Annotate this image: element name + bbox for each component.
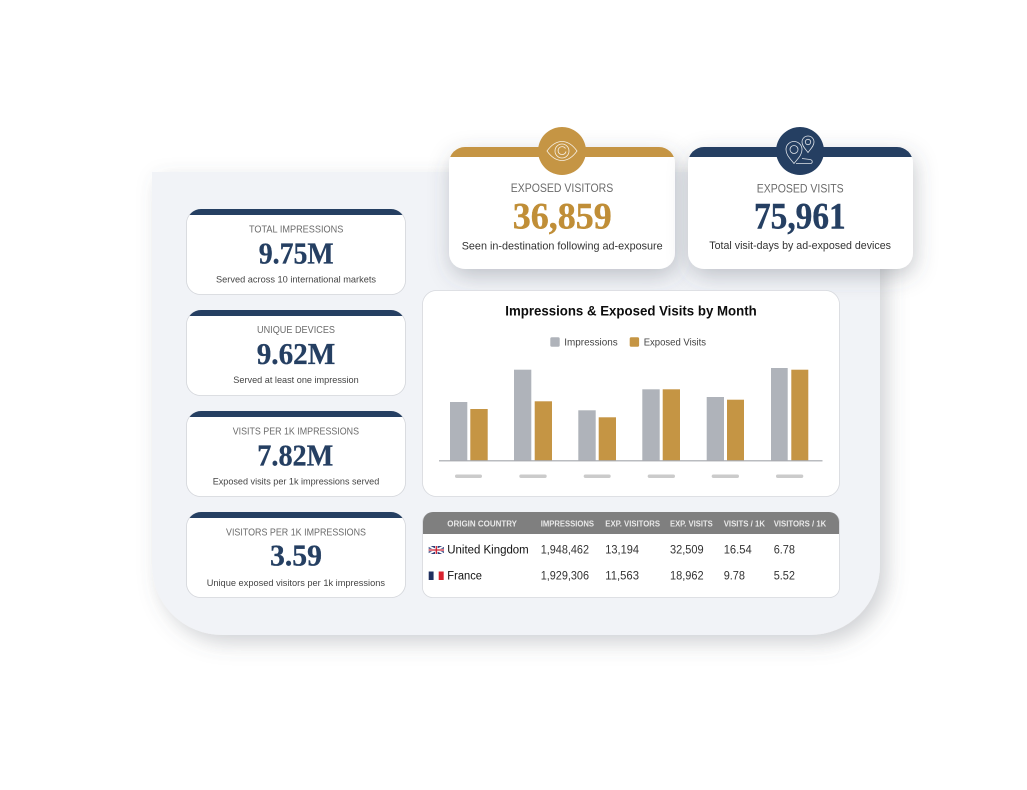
card: total impressions: TOTAL IMPRESSIONS: [249, 224, 343, 236]
card: total impressions: [186, 209, 406, 294]
table header: VISITORS / 1K: [774, 520, 827, 529]
table row: France: 11,563: [605, 571, 639, 583]
card: unique devices: Served at least one impression: [233, 375, 359, 386]
card: visitors per 1k impressions: 3.59: [270, 538, 322, 573]
panel: bar chart card: [422, 290, 840, 496]
table row: United Kingdom: 32,509: [670, 545, 704, 557]
table row: France: 9.78: [724, 571, 745, 583]
icon: eye: [538, 127, 586, 175]
card: visits per 1k impressions: 7.82M: [257, 437, 333, 472]
redacted month labels: [455, 474, 803, 478]
card: visits per 1k impressions: [186, 411, 406, 496]
table row: United Kingdom: 13,194: [605, 545, 640, 557]
chart legend: Exposed Visits: [644, 338, 706, 349]
table header: [423, 512, 839, 534]
card: total impressions: Served across 10 international markets: [216, 274, 376, 285]
card: exposed visits: Total visit-days by ad-exposed devices: [709, 240, 891, 252]
card: total impressions: 9.75M: [259, 236, 334, 271]
card: visits per 1k impressions: VISITS PER 1K IMPRESSIONS: [233, 425, 359, 437]
card: visitors per 1k impressions: VISITORS PER 1K IMPRESSIONS: [226, 526, 366, 538]
card: exposed visitors: [449, 127, 675, 269]
card: visitors per 1k impressions: [186, 512, 406, 598]
table row: France: France: [447, 571, 482, 583]
card: unique devices: 9.62M: [257, 336, 335, 371]
card: unique devices: UNIQUE DEVICES: [257, 324, 335, 336]
table header: EXP. VISITORS: [605, 520, 661, 529]
card: exposed visits: 75,961: [754, 196, 846, 237]
card: unique devices: [186, 310, 406, 396]
panel: origin country table: [422, 512, 840, 598]
bars: [450, 368, 808, 461]
table header: EXP. VISITS: [670, 520, 713, 529]
table row: United Kingdom: United Kingdom: [447, 545, 529, 557]
table row: United Kingdom: 6.78: [774, 545, 795, 557]
background panel: [152, 172, 880, 635]
card: exposed visitors: 36,859: [513, 196, 612, 237]
table row: France: [429, 571, 795, 583]
table header: ORIGIN COUNTRY: [447, 520, 518, 529]
chart legend: Impressions: [564, 338, 618, 349]
table header: IMPRESSIONS: [541, 520, 595, 529]
table row: United Kingdom: 1,948,462: [541, 545, 589, 557]
card: exposed visitors: Seen in-destination following ad-exposure: [462, 240, 663, 252]
card: exposed visitors: EXPOSED VISITORS: [511, 181, 613, 195]
table row: France: 5.52: [774, 571, 795, 583]
card: exposed visits: [688, 127, 913, 269]
icon: France flag: [429, 572, 444, 580]
icon: UK flag: [429, 546, 444, 554]
chart title: Impressions & Exposed Visits by Month: [505, 303, 757, 319]
table row: France: 18,962: [670, 571, 704, 583]
icon: map pins: [776, 127, 824, 175]
table row: United Kingdom: 16.54: [724, 545, 752, 557]
table header: VISITS / 1K: [724, 520, 765, 529]
card: visitors per 1k impressions: Unique exposed visitors per 1k impressions: [207, 578, 385, 589]
table row: United Kingdom: [429, 545, 795, 557]
table row: France: 1,929,306: [541, 571, 589, 583]
card: exposed visits: EXPOSED VISITS: [757, 181, 844, 195]
card: visits per 1k impressions: Exposed visits per 1k impressions served: [213, 477, 379, 488]
chart axis: [439, 460, 822, 461]
chart legend: [550, 337, 706, 349]
